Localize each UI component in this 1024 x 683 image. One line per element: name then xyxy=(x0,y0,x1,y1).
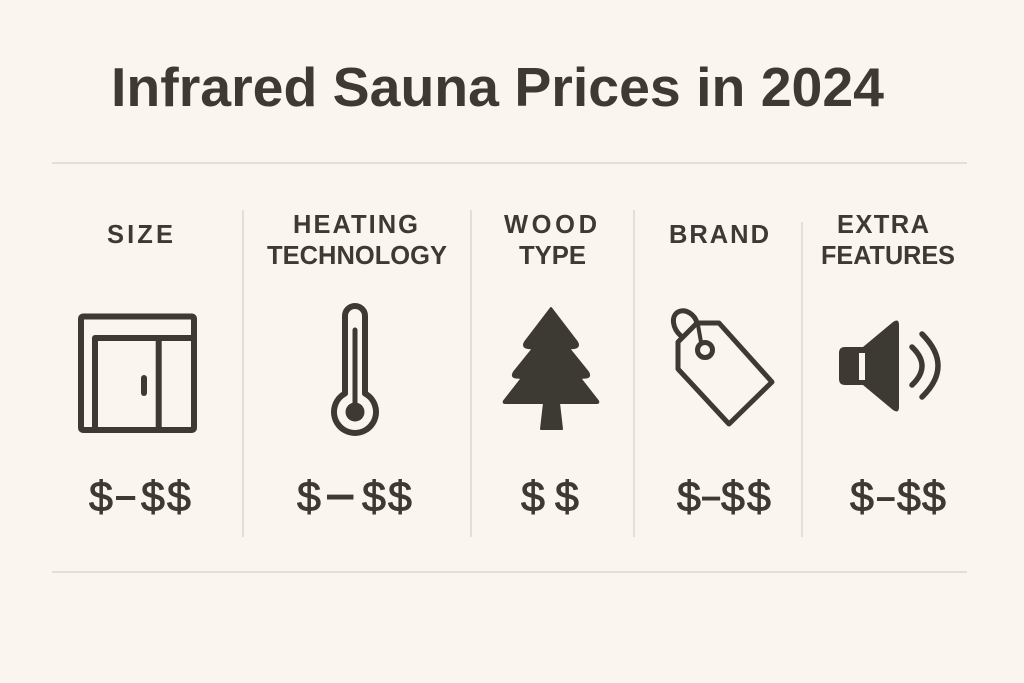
price: heating technology: $ xyxy=(362,473,386,521)
price: brand: $ xyxy=(677,473,701,521)
price: brand: – xyxy=(703,481,720,513)
heading: wood type: TYPE xyxy=(519,242,586,270)
panel: brand xyxy=(669,221,772,521)
price: wood type: $ xyxy=(555,473,579,521)
price: extra features: $ xyxy=(922,473,946,521)
icon: speaker xyxy=(839,321,938,411)
price: wood type: $ xyxy=(521,473,545,521)
panel: extra features xyxy=(821,211,955,521)
price: heating technology: – xyxy=(328,469,353,518)
title: Infrared Sauna Prices in 2024 xyxy=(111,56,884,118)
icon: sauna door xyxy=(81,316,194,430)
price: brand: $ xyxy=(721,473,745,521)
price: extra features: $ xyxy=(897,473,921,521)
heading: heating technology: TECHNOLOGY xyxy=(267,242,447,270)
panel: size xyxy=(81,221,194,521)
panel: wood type xyxy=(504,211,598,521)
price: brand: $ xyxy=(747,473,771,521)
price: size: $ xyxy=(141,473,165,521)
heading: extra features: FEATURES xyxy=(821,242,955,270)
heading: extra features: EXTRA xyxy=(837,211,929,239)
price: size: $ xyxy=(167,473,191,521)
price: size: $ xyxy=(89,473,113,521)
price: heating technology: $ xyxy=(297,473,321,521)
price: size: – xyxy=(117,478,135,513)
price: heating technology: $ xyxy=(388,473,412,521)
heading: heating technology: HEATING xyxy=(293,211,418,239)
panel: heating technology xyxy=(267,211,447,521)
icon: thermometer xyxy=(334,306,376,433)
heading: brand: BRAND xyxy=(669,221,769,249)
icon: price tag xyxy=(673,311,772,424)
price: extra features: $ xyxy=(850,473,874,521)
price: extra features: – xyxy=(878,481,894,512)
icon: pine tree xyxy=(504,308,598,429)
heading: wood type: WOOD xyxy=(504,211,597,239)
heading: size: SIZE xyxy=(107,221,173,249)
